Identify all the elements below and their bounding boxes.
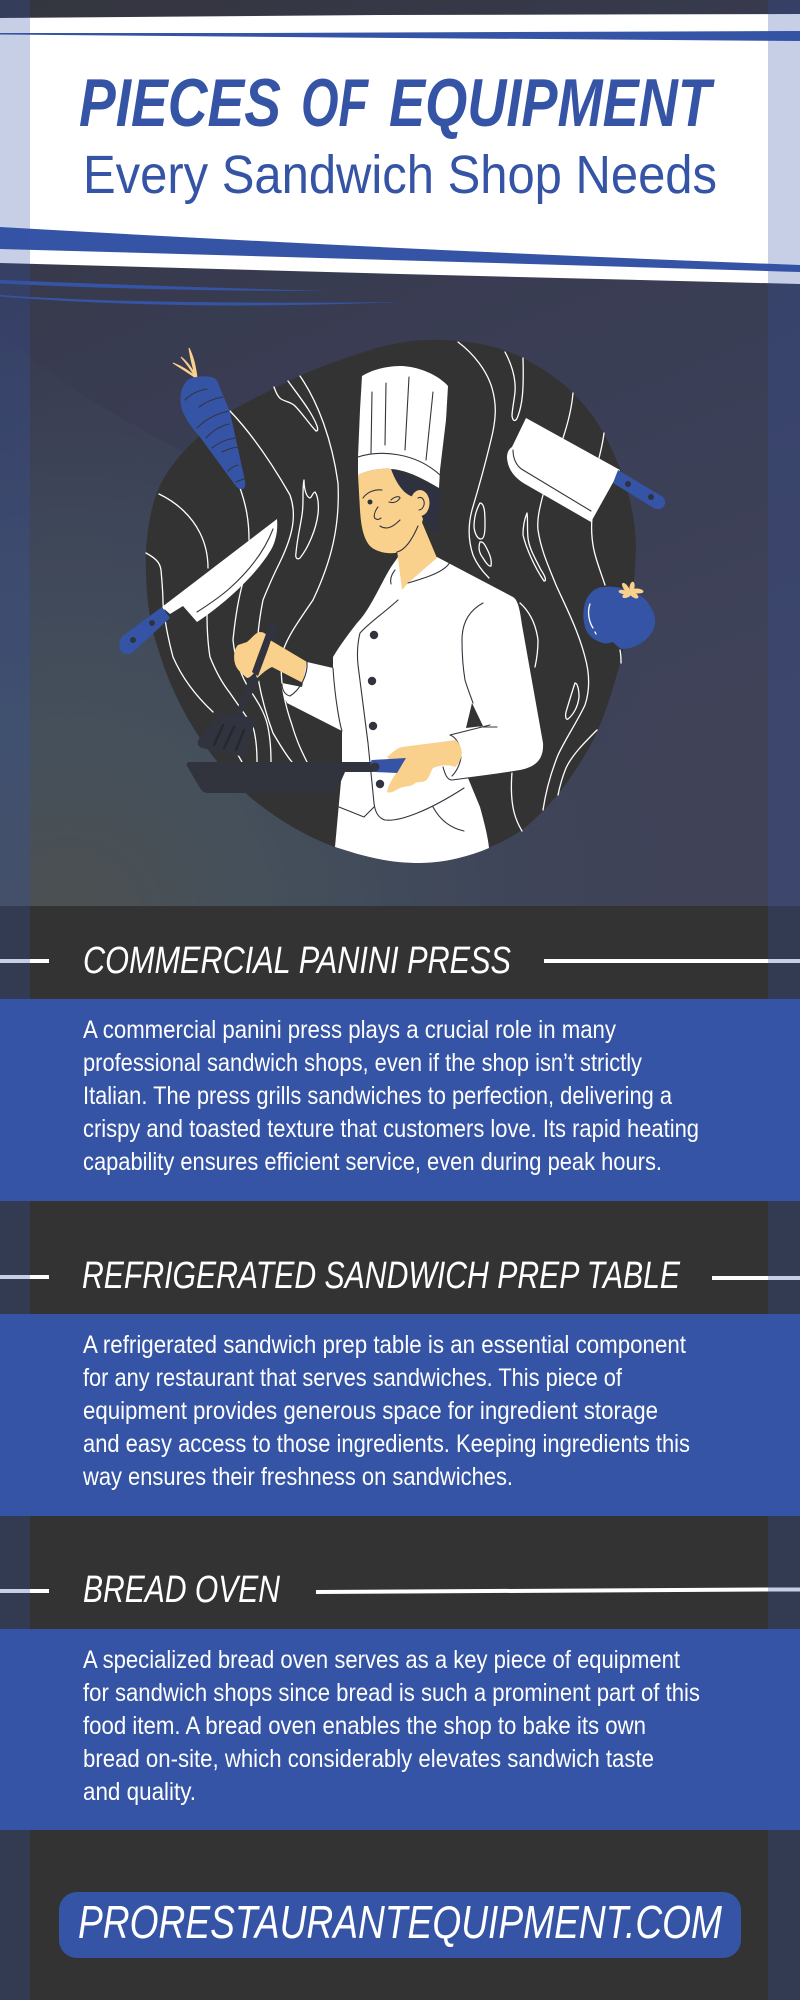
tomato	[583, 581, 655, 649]
jacket buttons	[368, 631, 384, 788]
body text: professional sandwich shops, even if the shop isn’t strictly	[83, 1049, 642, 1077]
spatula handle over hand	[252, 628, 274, 676]
body text: and quality.	[83, 1778, 196, 1806]
jaw	[397, 526, 418, 552]
body text: bread on-site, which considerably elevates sandwich taste	[83, 1745, 654, 1773]
header banner	[0, 14, 800, 284]
pan handle grip	[371, 758, 406, 773]
spatula	[198, 623, 277, 757]
body text: A refrigerated sandwich prep table is an essential component	[83, 1331, 686, 1359]
body text: for any restaurant that serves sandwiches. This piece of	[83, 1364, 622, 1392]
lower dark background	[0, 906, 800, 2000]
section: refrigerated sandwich prep table	[0, 1255, 800, 1516]
right hand	[387, 740, 462, 793]
title: EQUIPMENT	[389, 65, 715, 141]
heading rule	[0, 1588, 800, 1594]
heading rule	[0, 1275, 800, 1280]
body text: A commercial panini press plays a crucial role in many	[83, 1016, 616, 1044]
white contour lines	[146, 342, 621, 831]
title	[79, 65, 715, 141]
blue panel	[0, 999, 800, 1201]
body text: equipment provides generous space for ingredient storage	[83, 1397, 658, 1425]
website footer pill	[59, 1892, 741, 1958]
blue panel	[0, 1314, 800, 1516]
cleaver	[507, 418, 665, 522]
chef knife	[119, 519, 277, 654]
body text	[83, 1016, 699, 1176]
top stripe	[0, 31, 800, 41]
brow and eyes	[363, 490, 400, 503]
hero background	[0, 0, 800, 906]
chef illustration	[119, 340, 665, 863]
subtitle: Every Sandwich Shop Needs	[83, 145, 717, 205]
blue panel	[0, 1629, 800, 1830]
body text: crispy and toasted texture that customers love. Its rapid heating	[83, 1115, 699, 1143]
heading: COMMERCIAL PANINI PRESS	[83, 940, 511, 982]
body text: A specialized bread oven serves as a key piece of equipment	[83, 1646, 680, 1674]
pan	[187, 758, 406, 793]
chef hat	[358, 366, 448, 488]
ear	[410, 490, 430, 516]
jacket outlines	[282, 556, 513, 831]
hair	[391, 469, 442, 534]
thin swoosh lines	[0, 280, 403, 305]
section: bread oven	[0, 1569, 800, 1830]
body text: way ensures their freshness on sandwiches.	[82, 1463, 513, 1491]
lower swoosh	[0, 227, 800, 272]
body text: and easy access to those ingredients. Keeping ingredients this	[83, 1430, 690, 1458]
title: PIECES	[79, 65, 281, 141]
neck	[397, 520, 437, 590]
title: OF	[301, 65, 369, 141]
body text: Italian. The press grills sandwiches to perfection, delivering a	[83, 1082, 672, 1110]
carrot	[173, 348, 245, 489]
dark blob	[146, 340, 636, 863]
body text	[83, 1646, 700, 1806]
section: commercial panini press	[0, 940, 800, 1201]
heading: BREAD OVEN	[83, 1569, 280, 1611]
heading rule	[0, 959, 800, 963]
body text: for sandwich shops since bread is such a prominent part of this	[83, 1679, 700, 1707]
left hand	[234, 632, 307, 683]
chef jacket	[282, 520, 543, 863]
body text	[82, 1331, 690, 1491]
nose and smile	[374, 507, 400, 528]
body text: capability ensures efficient service, even during peak hours.	[83, 1148, 662, 1176]
face	[358, 469, 442, 553]
underarm gap	[466, 703, 483, 728]
body text: food item. A bread oven enables the shop to bake its own	[83, 1712, 646, 1740]
